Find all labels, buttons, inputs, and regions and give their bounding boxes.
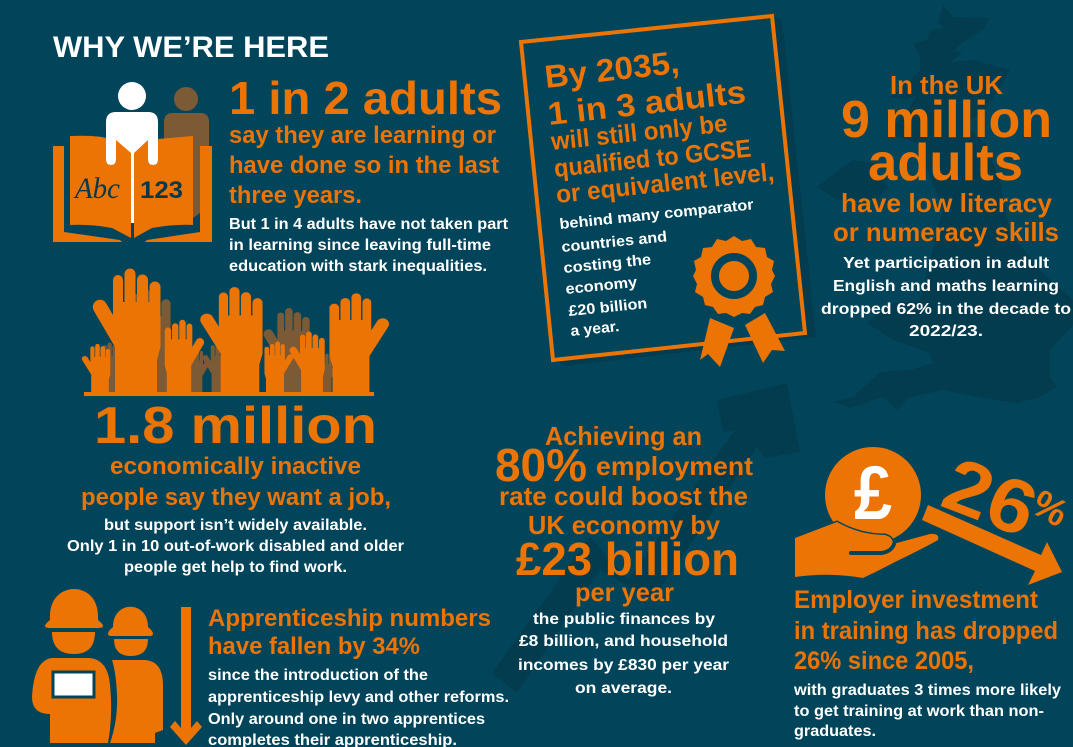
- panel: 9 million adults: or numeracy skills: [833, 217, 1059, 247]
- panel: 80% employment: incomes by £830 per year: [518, 657, 729, 674]
- icon: raised hands: [82, 268, 389, 396]
- panel: 1.8 million: but support isn’t widely available.: [104, 517, 367, 534]
- white person: [106, 82, 158, 223]
- certificate shadow: [553, 16, 816, 366]
- rear worker: [108, 607, 163, 743]
- panel: 80% employment: employment: [596, 451, 753, 481]
- panel: certificate: costing the: [563, 251, 652, 277]
- panel: employer investment: to get training at work than non-: [794, 703, 1044, 720]
- icon: open book with two people: [53, 82, 212, 242]
- certificate heading: By 2035,: [543, 44, 681, 95]
- icon: open book with two people: 123: [140, 177, 183, 204]
- panel: 1 in 2 adults: three years.: [229, 182, 362, 209]
- panel: 1.8 million: economically inactive: [110, 453, 361, 480]
- panel: employer investment: with graduates 3 times more likely: [793, 682, 1061, 699]
- panel: 9 million adults: 2022/23.: [909, 323, 983, 340]
- panel: 9 million adults: English and maths learning: [833, 278, 1059, 295]
- panel: apprenticeship numbers: since the introduction of the: [208, 667, 428, 684]
- panel: 9 million adults: dropped 62% in the decade to: [821, 301, 1071, 318]
- panel: 80% employment: £23 billion: [516, 533, 739, 585]
- title: WHY WE’RE HERE: [53, 31, 329, 64]
- panel: 9 million adults: have low literacy: [841, 188, 1053, 218]
- panel: 80% employment: £8 billion, and household: [519, 633, 728, 650]
- brown hands: [95, 288, 338, 392]
- panel: 1 in 2 adults: 1 in 2 adults: [229, 72, 502, 124]
- panel: 1 in 2 adults: say they are learning or: [229, 122, 496, 149]
- panel: employer investment: graduates.: [794, 723, 876, 740]
- panel: 1.8 million: people say they want a job,: [81, 484, 391, 511]
- panel: 1 in 2 adults: in learning since leaving full-time: [229, 237, 491, 254]
- panel: 1 in 2 adults: have done so in the last: [229, 152, 499, 179]
- panel: apprenticeship numbers: Apprenticeship numbers: [208, 605, 491, 632]
- panel: 1 in 2 adults: education with stark inequalities.: [229, 258, 487, 275]
- panel: certificate: countries and: [561, 228, 668, 256]
- panel: 1.8 million: Only 1 in 10 out-of-work disabled and older: [67, 538, 404, 555]
- panel: 1 in 2 adults: But 1 in 4 adults have not taken part: [229, 216, 508, 233]
- background map of the UK: [817, 5, 1073, 410]
- panel: employer investment: [793, 586, 1061, 740]
- panel: certificate: [521, 16, 816, 367]
- panel: 1.8 million: [67, 397, 404, 576]
- panel: 9 million adults: Yet participation in adult: [843, 255, 1050, 272]
- coin: [825, 447, 921, 543]
- panel: 80% employment: on average.: [575, 680, 672, 697]
- label: 26%: 26: [932, 442, 1048, 554]
- book covers and pages: [53, 136, 212, 242]
- panel: certificate: qualified to GCSE: [553, 134, 753, 183]
- panel: 9 million adults: adults: [868, 134, 1023, 192]
- panel: apprenticeship numbers: have fallen by 34%: [208, 633, 420, 660]
- pound sign: £: [854, 451, 892, 536]
- panel: 80% employment: per year: [575, 577, 674, 607]
- certificate frame: [521, 16, 805, 360]
- panel: 80% employment: [495, 421, 753, 697]
- panel: employer investment: 26% since 2005,: [794, 647, 974, 675]
- panel: 80% employment: the public finances by: [533, 611, 715, 628]
- icon: two workers in hard hats: [32, 589, 163, 743]
- background upward arrow: [492, 383, 800, 693]
- panel: apprenticeship numbers: Only around one in two apprentices: [208, 711, 485, 728]
- panel: 80% employment: Achieving an: [545, 421, 702, 451]
- icon: rosette: [693, 236, 785, 367]
- arrow: investment falling: [922, 505, 1062, 585]
- panel: 9 million adults: [821, 70, 1071, 340]
- brown person: [164, 87, 209, 218]
- panel: certificate: £20 billion: [568, 295, 648, 320]
- panel: 80% employment: 80%: [495, 439, 587, 491]
- arrow: apprenticeships falling: [170, 607, 202, 745]
- panel: certificate: economy: [565, 274, 639, 298]
- front worker: [32, 589, 111, 743]
- book text: Abc: [73, 172, 120, 205]
- icon: hand holding pound coin: [795, 447, 938, 578]
- panel: 1 in 2 adults: [229, 72, 508, 275]
- panel: employer investment: Employer investment: [794, 586, 1039, 614]
- panel: apprenticeship numbers: apprenticeship levy and other reforms.: [208, 689, 509, 706]
- panel: certificate: will still only be: [549, 110, 729, 156]
- panel: 80% employment: rate could boost the: [499, 481, 748, 511]
- panel: certificate: or equivalent level,: [555, 158, 775, 209]
- panel: 1.8 million: people get help to find work.: [124, 559, 347, 576]
- panel: apprenticeship numbers: [208, 605, 509, 747]
- panel: 9 million adults: 9 million: [841, 91, 1052, 149]
- certificate body text: behind many comparator: [559, 196, 755, 233]
- panel: employer investment: in training has dropped: [794, 617, 1058, 645]
- panel: 80% employment: UK economy by: [528, 510, 721, 540]
- hand: [795, 522, 938, 578]
- orange hands: [82, 268, 389, 396]
- panel: 9 million adults: In the UK: [890, 70, 1003, 100]
- panel: 1.8 million: 1.8 million: [94, 397, 377, 455]
- panel: certificate: 1 in 3 adults: [546, 74, 748, 132]
- panel: certificate: a year.: [570, 318, 620, 340]
